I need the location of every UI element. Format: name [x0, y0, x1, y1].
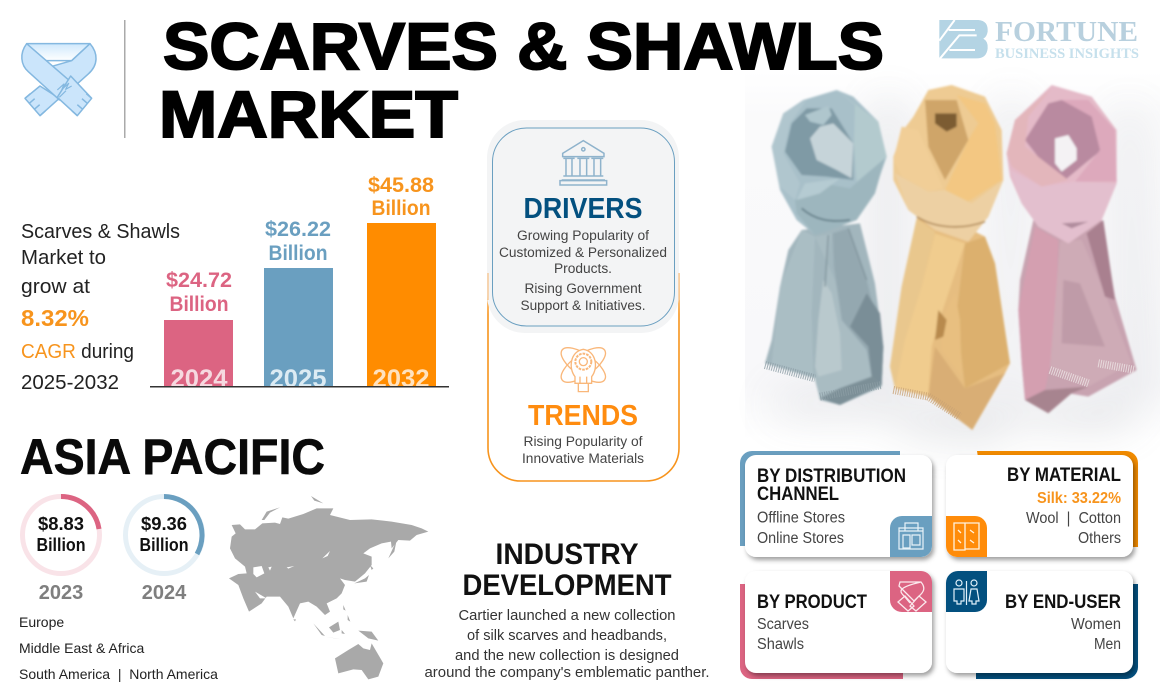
- bar 2025: Billion: [268, 241, 328, 265]
- fringe: pink: [1050, 363, 1135, 383]
- card: by material: [946, 451, 1138, 557]
- card: by end-user: Women: [1071, 616, 1121, 633]
- card: by end-user: BY END-USER: [1005, 592, 1121, 613]
- text: industry development: and the new collection is designed: [455, 648, 679, 664]
- card: by material: Silk: 33.22%: [1037, 490, 1121, 507]
- logo: Fortune Business Insights: BUSINESS INSIGHTS: [995, 46, 1139, 62]
- text block: CAGR statement: Market to: [21, 246, 106, 269]
- text: trends list: Innovative Materials: [522, 451, 644, 467]
- card: by product: [740, 571, 932, 679]
- donut: 2024: $9.36: [141, 514, 187, 534]
- heading: industry development: DEVELOPMENT: [462, 569, 672, 602]
- map: Asia Pacific: [229, 496, 428, 679]
- text: trends list: [522, 434, 644, 467]
- donut: 2023: Billion: [36, 535, 86, 555]
- text: trends list: Rising Popularity of: [524, 434, 643, 450]
- icon: store: [890, 516, 932, 557]
- card: by product: Shawls: [757, 636, 804, 653]
- bar 2032: $45.88: [368, 173, 434, 197]
- bar 2025: $26.22: [265, 217, 331, 241]
- bar chart: [150, 173, 449, 393]
- title: SCARVES & SHAWLS: [163, 9, 884, 83]
- text: drivers list: Rising Government: [524, 281, 642, 297]
- panel: trends: [488, 273, 679, 481]
- heading: drivers: DRIVERS: [524, 193, 642, 225]
- icon: scarf logo: [22, 44, 96, 116]
- text: industry development: around the company's emblematic panther.: [424, 665, 710, 681]
- text: drivers list: [499, 228, 667, 314]
- icon: scarf: [890, 571, 932, 612]
- heading: Asia Pacific: ASIA PACIFIC: [20, 429, 325, 485]
- icon: innovation bulb: [556, 341, 611, 392]
- title: MARKET: [159, 77, 458, 151]
- photo: three scarves: [745, 72, 1160, 440]
- logo: Fortune Business Insights: [939, 16, 1139, 62]
- scarf: tan: [890, 85, 1010, 430]
- text block: CAGR statement: CAGR during: [21, 340, 134, 363]
- icon: people: [946, 571, 987, 612]
- bar 2024: [164, 268, 233, 393]
- text: industry development: Cartier launched a new collection: [458, 608, 676, 624]
- text block: CAGR statement: grow at: [21, 275, 90, 298]
- panel: drivers: [487, 120, 679, 333]
- card: by distribution channel: Offline Stores: [757, 510, 845, 526]
- donut: 2024: [126, 496, 202, 604]
- text: industry development: [424, 608, 710, 681]
- title: [159, 9, 884, 151]
- bar 2024: 2024: [170, 365, 228, 393]
- bar 2025: [264, 217, 333, 393]
- donut: 2024: Billion: [140, 535, 188, 555]
- fringe: blue: [765, 365, 882, 397]
- card: by end-user: [946, 571, 1138, 679]
- text: drivers list: Customized & Personalized: [499, 245, 667, 261]
- soft shadows: [775, 100, 1145, 440]
- regions list: Middle East & Africa: [19, 640, 144, 656]
- card: by distribution channel: CHANNEL: [757, 484, 839, 505]
- scarf: pink: [1007, 85, 1137, 413]
- card: by distribution channel: Online Stores: [757, 530, 844, 547]
- divider line: [124, 20, 126, 138]
- text: drivers list: Products.: [554, 261, 612, 277]
- icon: fabric: [946, 516, 987, 557]
- text block: CAGR statement: Scarves & Shawls: [21, 220, 180, 243]
- card: by material: BY MATERIAL: [1007, 465, 1121, 486]
- card: by product: Scarves: [757, 616, 809, 633]
- text: drivers list: Growing Popularity of: [517, 228, 649, 244]
- text block: CAGR statement: 2025-2032: [21, 371, 119, 394]
- text block: CAGR statement: 8.32%: [21, 305, 89, 331]
- card: by distribution channel: [740, 451, 932, 557]
- text: drivers list: Support & Initiatives.: [520, 298, 646, 314]
- card: by product: BY PRODUCT: [757, 592, 867, 613]
- regions list: [19, 614, 218, 682]
- heading: industry development: [462, 538, 672, 602]
- card: by material: Others: [1078, 530, 1121, 547]
- heading: industry development: INDUSTRY: [496, 538, 638, 571]
- text block: CAGR statement: [21, 220, 180, 394]
- bar 2024: $24.72: [166, 268, 232, 292]
- bar 2032: [367, 173, 436, 393]
- logo: Fortune Business Insights: FORTUNE: [995, 16, 1138, 48]
- donut: 2023: $8.83: [38, 514, 84, 534]
- donut: 2023: 2023: [39, 582, 83, 604]
- card: by distribution channel: BY DISTRIBUTION: [757, 466, 906, 487]
- bar 2025: 2025: [270, 365, 327, 393]
- text: industry development: of silk scarves and headbands,: [467, 628, 667, 644]
- icon: bank building: [560, 141, 607, 185]
- card: by material: Wool | Cotton: [1026, 510, 1121, 527]
- bar 2032: Billion: [372, 196, 430, 220]
- bar 2032: 2032: [372, 365, 430, 393]
- regions list: Europe: [19, 614, 64, 630]
- heading: trends: TRENDS: [528, 400, 638, 432]
- donut: 2024: 2024: [142, 582, 187, 604]
- bar 2024: Billion: [170, 292, 228, 316]
- regions list: South America | North America: [19, 666, 218, 682]
- fringe: tan: [893, 390, 960, 417]
- card: by end-user: Men: [1094, 636, 1121, 653]
- scarf: blue: [765, 90, 887, 405]
- donut: 2023: [22, 496, 100, 604]
